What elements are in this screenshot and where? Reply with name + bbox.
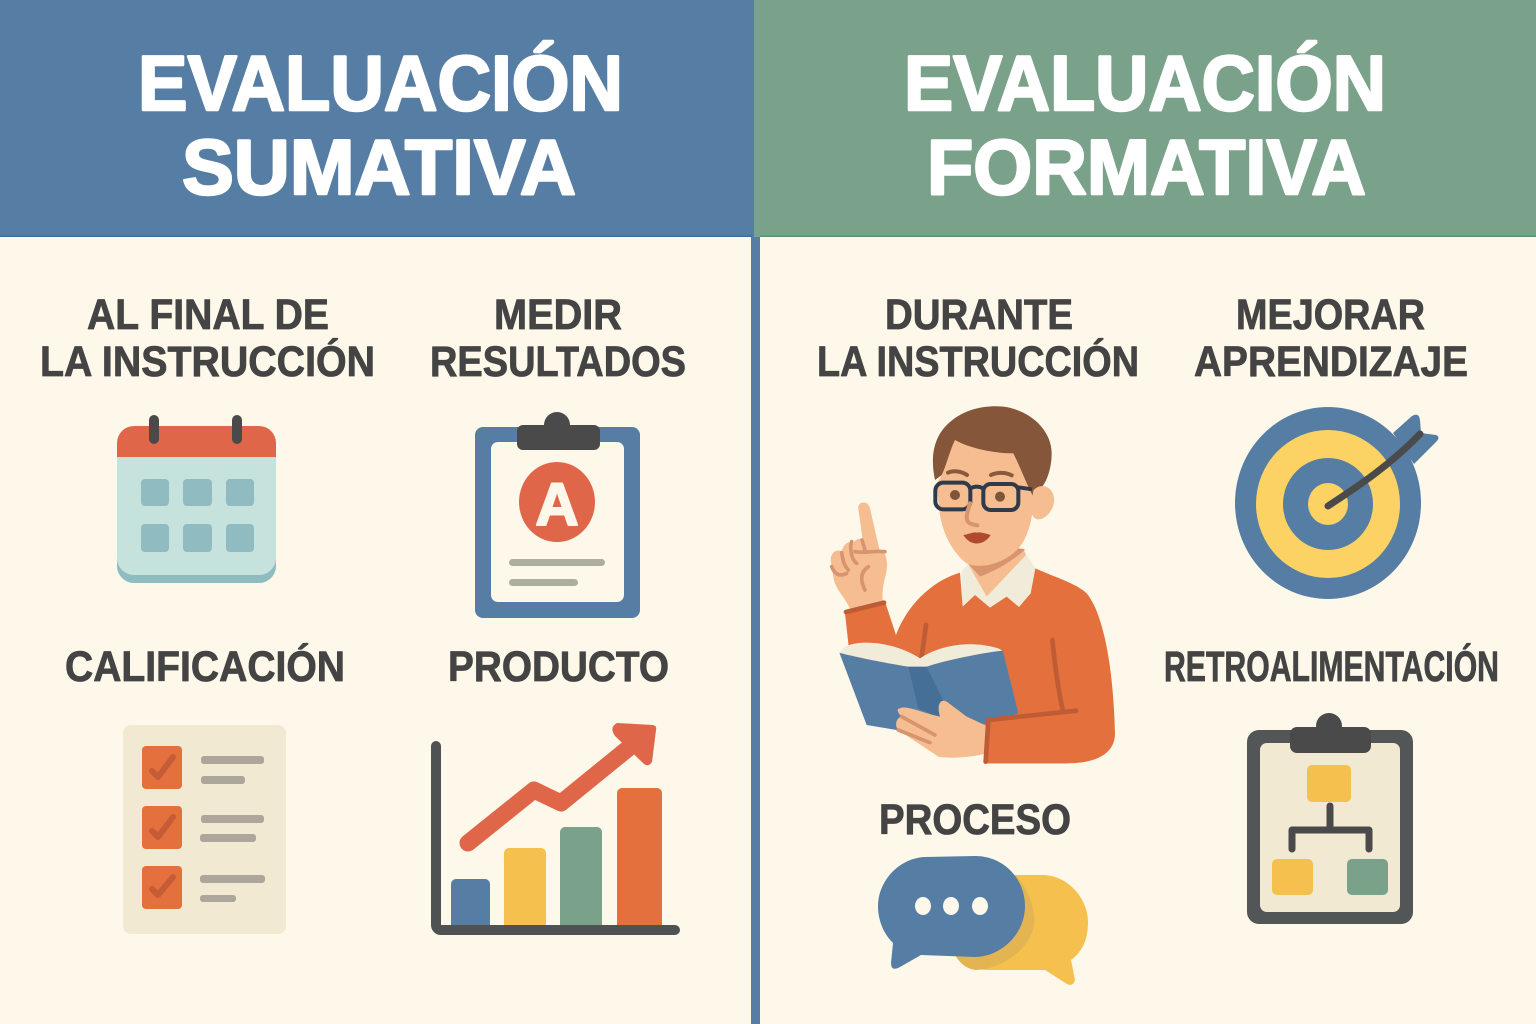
label: al final de la instrucción: LA INSTRUCCIÓN [40, 337, 375, 386]
label: medir resultados [430, 291, 686, 386]
mouth [963, 532, 991, 543]
cuff [986, 711, 1076, 763]
label: mejorar aprendizaje [1194, 291, 1468, 386]
label: medir resultados: MEDIR [494, 291, 622, 339]
illustration: teacher reading and pointing up [831, 406, 1115, 763]
title: evaluación formativa: FORMATIVA [927, 123, 1366, 211]
neck [967, 548, 1026, 597]
collar [961, 553, 1035, 608]
face [937, 440, 1033, 566]
sleeve lines [846, 603, 1063, 710]
label: al final de la instrucción [40, 291, 375, 386]
label: mejorar aprendizaje: APRENDIZAJE [1194, 338, 1468, 386]
sweater [845, 568, 1115, 763]
finger creases [832, 540, 885, 590]
eyebrows [948, 471, 1012, 475]
icon: calendar [117, 415, 276, 583]
title: evaluación formativa [904, 39, 1386, 211]
label: calificación: CALIFICACIÓN [65, 642, 345, 691]
title: evaluación sumativa: EVALUACIÓN [138, 39, 623, 127]
vertical divider [751, 237, 760, 1024]
icon: clipboard with flowchart [1247, 713, 1413, 924]
label: durante la instrucción [817, 291, 1139, 386]
glasses [935, 483, 1032, 510]
eyes [950, 490, 960, 500]
panel: header formativa [754, 0, 1536, 237]
title: evaluación sumativa: SUMATIVA [182, 123, 576, 211]
icon: clipboard with grade A: A [535, 471, 579, 538]
label: durante la instrucción: LA INSTRUCCIÓN [817, 337, 1139, 386]
title: evaluación formativa: EVALUACIÓN [904, 39, 1386, 127]
book [839, 650, 1018, 730]
hair [933, 406, 1052, 497]
label: producto: PRODUCTO [448, 643, 669, 691]
icon: target with arrow [1235, 407, 1438, 599]
icon: speech bubbles [878, 856, 1088, 985]
label: mejorar aprendizaje: MEJORAR [1236, 291, 1425, 339]
title: evaluación sumativa [138, 39, 623, 211]
lower hand [896, 701, 988, 758]
nose [967, 503, 977, 525]
chart: rising bars with arrow [436, 723, 675, 930]
panel: header sumativa [0, 0, 754, 237]
icon: clipboard with grade A [475, 412, 640, 618]
label: proceso: PROCESO [879, 796, 1071, 844]
label: medir resultados: RESULTADOS [430, 338, 686, 386]
ear [1031, 486, 1054, 519]
raised hand [831, 502, 887, 609]
icon: checklist [123, 725, 286, 934]
label: durante la instrucción: DURANTE [885, 291, 1073, 339]
label: al final de la instrucción: AL FINAL DE [87, 291, 329, 339]
